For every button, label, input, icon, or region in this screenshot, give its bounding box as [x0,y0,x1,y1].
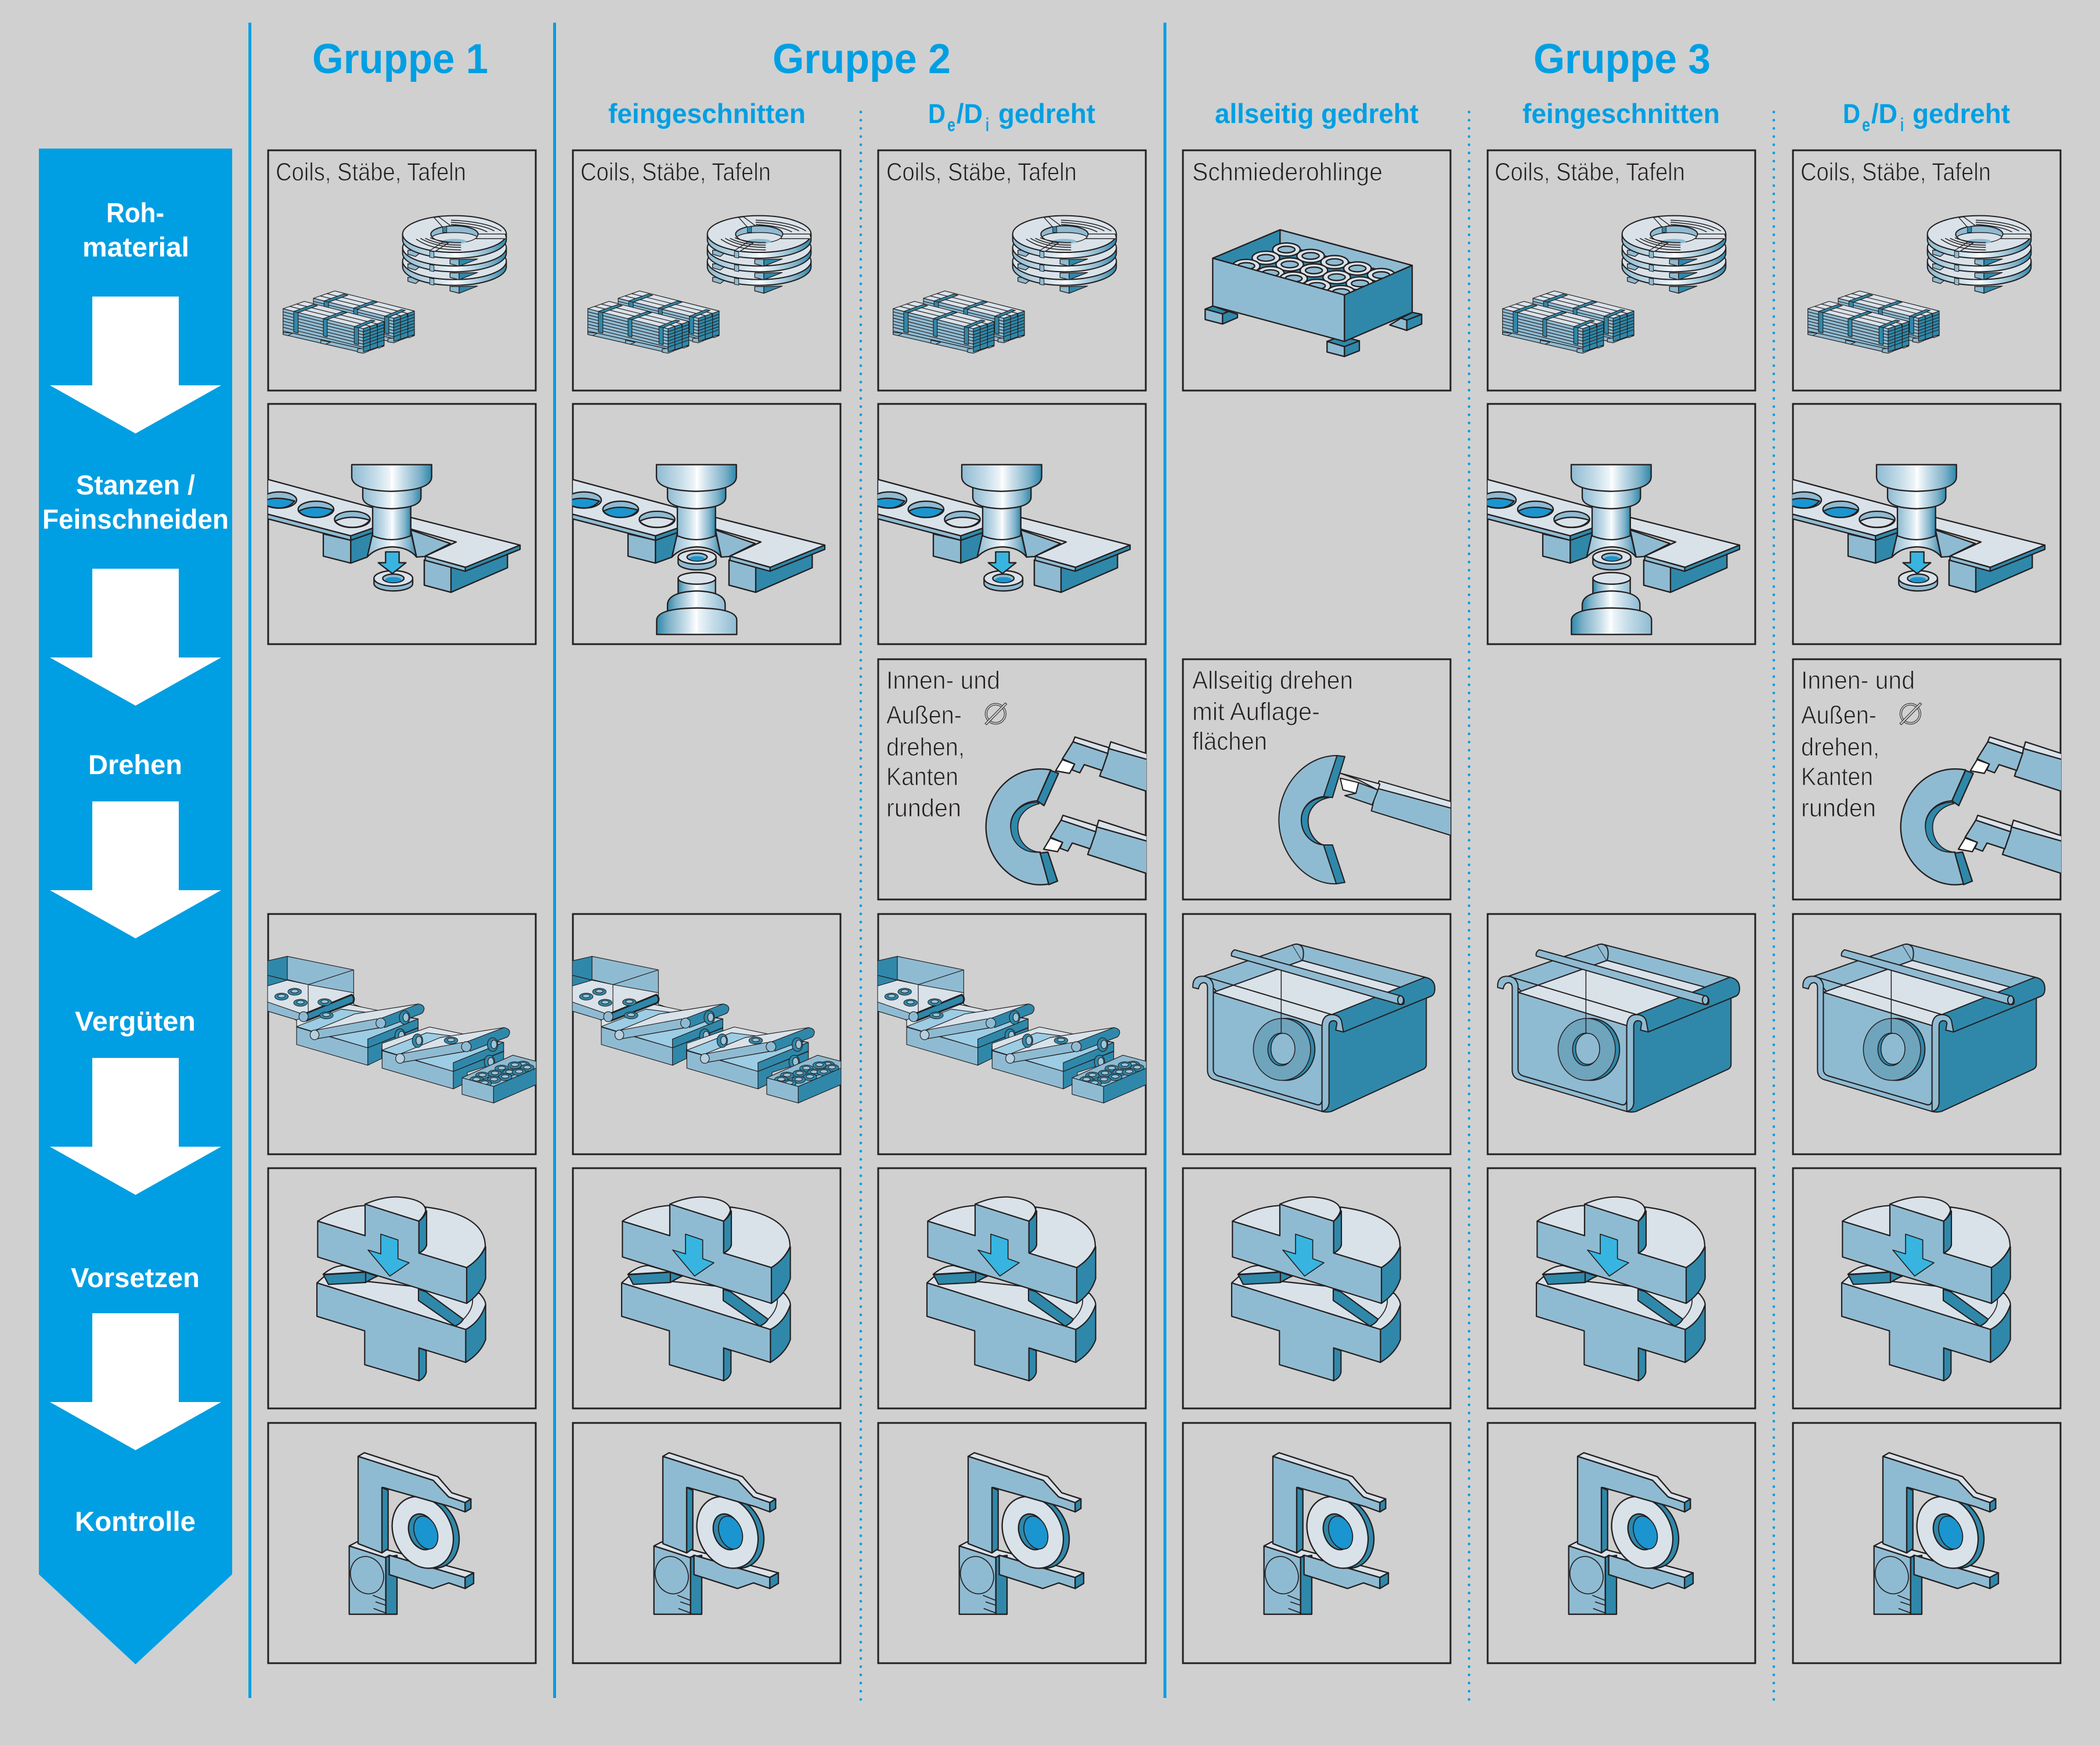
heading: Gruppe 3: Gruppe 3 [1533,36,1711,82]
panel: Stanzen [1787,404,2061,644]
arrow 5 [50,1313,221,1450]
subheading: feingeschnitten (Gruppe 2): feingeschnitten [608,98,806,129]
panel: Rohmaterial coils: Coils, Stäbe, Tafeln [1800,158,1991,186]
panel: Kontrolle [268,1423,536,1663]
subheading: De/Di gedreht (Gruppe 3): gedreht [1913,98,2010,129]
panel: Drehen: Innen- und [1801,666,1915,695]
panel: Drehen: runden [1801,794,1876,822]
column 2 panels [567,150,841,1663]
panel: Schmiederohlinge [1183,150,1450,391]
panel: Schmiederohlinge: Schmiederohlinge [1192,158,1383,186]
panel: Drehen: Innen- und [886,666,1000,695]
column 5 panels [1481,150,1755,1663]
panel: Rohmaterial coils: Coils, Stäbe, Tafeln [886,158,1077,186]
panel: Stanzen [262,404,536,644]
panel: Rohmaterial coils [878,150,1146,391]
panel: Vergüten bath [1793,914,2061,1154]
subheading: allseitig gedreht: allseitig gedreht [1215,98,1419,129]
panel: Allseitig drehen [1183,659,1451,899]
step: Kontrolle: Kontrolle [75,1506,196,1537]
panel: Drehen: Kanten [886,763,958,791]
panel: Drehen [878,659,1160,899]
step: Stanzen / Feinschneiden: Stanzen / [76,469,195,500]
subheading: De/Di gedreht (Gruppe 3): e [1862,114,1870,135]
panel: Vergüten [878,914,1146,1154]
subheading: De/Di gedreht (Gruppe 2): D [928,98,946,129]
panel: Vorsetzen [268,1168,536,1408]
panel: Feinschneiden [567,404,840,644]
panel: Drehen: drehen, [1801,733,1879,761]
panel: Vergüten bath [1183,914,1450,1154]
panel: Vorsetzen [573,1168,840,1408]
panel: Allseitig drehen: flächen [1192,727,1267,756]
column 3 panels [872,150,1160,1663]
panel: Drehen: drehen, [886,733,965,761]
subheading: De/Di gedreht (Gruppe 2): e [947,114,955,135]
panel: Drehen: Außen- [886,701,962,729]
panel: Kontrolle [1183,1423,1450,1663]
subheading: feingeschnitten (Gruppe 3): feingeschnitten [1522,98,1720,129]
panel: Kontrolle [1793,1423,2061,1663]
subheading: De/Di gedreht (Gruppe 2): /D [957,98,983,129]
panel: Rohmaterial coils [1793,150,2061,391]
column 6 panels [1787,150,2075,1663]
arrow 2 [50,569,221,706]
step: Rohmaterial: Roh- [106,197,164,228]
process flow column [39,149,232,1664]
panel: Vorsetzen [1183,1168,1450,1408]
panel: Allseitig drehen: mit Auflage- [1192,698,1320,726]
step: Rohmaterial: material [82,232,189,262]
step: Vorsetzen: Vorsetzen [71,1262,200,1293]
panel: Rohmaterial coils: Coils, Stäbe, Tafeln [1495,158,1685,186]
arrow 1 [50,297,221,433]
panel: Kontrolle [573,1423,840,1663]
panel: Stanzen [872,404,1146,644]
panel: Vergüten [268,914,536,1154]
arrow 3 [50,801,221,938]
subheading: De/Di gedreht (Gruppe 3) [1843,98,2010,135]
panel: Drehen [1793,659,2075,899]
panel: Rohmaterial coils [268,150,536,391]
column 4 panels [1183,150,1451,1663]
panel: Drehen: runden [886,794,961,822]
panel: Kontrolle [878,1423,1146,1663]
panel: Vergüten bath [1488,914,1755,1154]
arrow 4 [50,1058,221,1195]
panel: Vorsetzen [878,1168,1146,1408]
subheading: De/Di gedreht (Gruppe 2): gedreht [998,98,1095,129]
subheading: De/Di gedreht (Gruppe 2) [928,98,1095,135]
panel: Rohmaterial coils: Coils, Stäbe, Tafeln [580,158,771,186]
panel: Kontrolle [1488,1423,1755,1663]
step: Stanzen / Feinschneiden: Feinschneiden [42,504,229,534]
step: Rohmaterial [82,197,189,262]
column 1 panels [262,150,536,1663]
subheading: De/Di gedreht (Gruppe 3): /D [1871,98,1897,129]
step: Drehen: Drehen [88,749,182,780]
panel: Feinschneiden [1481,404,1755,644]
step: Stanzen / Feinschneiden [42,469,229,534]
panel: Rohmaterial coils [573,150,840,391]
subheading: De/Di gedreht (Gruppe 3): D [1843,98,1860,129]
panel: Vorsetzen [1793,1168,2061,1408]
panel: Drehen: Außen- [1801,701,1877,729]
panel: Vorsetzen [1488,1168,1755,1408]
panel: Rohmaterial coils: Coils, Stäbe, Tafeln [276,158,466,186]
subheading: De/Di gedreht (Gruppe 3): i [1900,114,1904,135]
flow background arrow [39,149,232,1664]
heading: Gruppe 2: Gruppe 2 [773,36,951,82]
step: Vergüten: Vergüten [75,1006,196,1036]
panel: Rohmaterial coils [1488,150,1755,391]
panel: Drehen: Kanten [1801,763,1873,791]
subheading: De/Di gedreht (Gruppe 2): i [986,114,989,135]
heading: Gruppe 1: Gruppe 1 [312,36,488,82]
panel: Allseitig drehen: Allseitig drehen [1192,666,1353,695]
column dividers [250,23,1774,1701]
panel: Vergüten [572,914,841,1154]
